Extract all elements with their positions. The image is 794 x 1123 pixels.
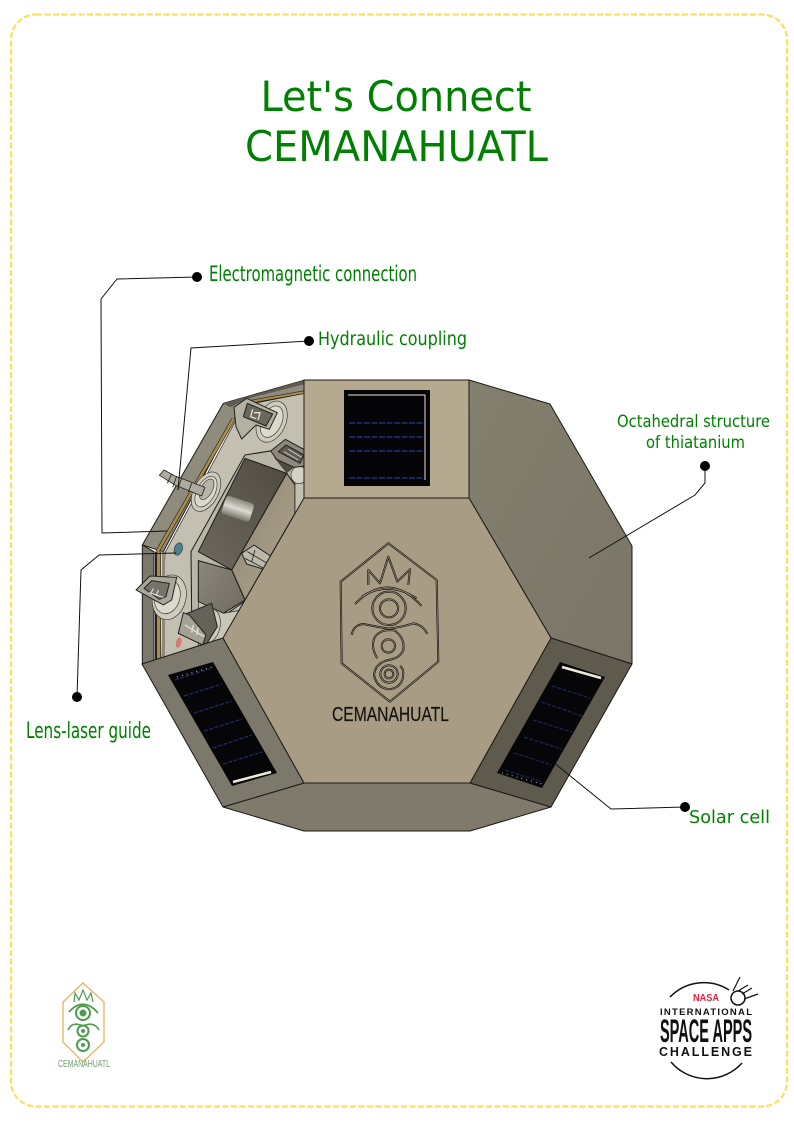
bottom bracket face: [178, 613, 206, 645]
left collar: [147, 571, 191, 624]
logo: NASA Space Apps Challenge: [659, 977, 758, 1079]
inner bracket: [242, 545, 272, 570]
label: octahedral structure: [617, 412, 770, 452]
hole lip: [191, 448, 305, 615]
top collar: [250, 396, 294, 447]
logo: CEMANAHUATL small: CEMANAHUATL: [58, 1059, 110, 1070]
bottom bracket collar: [190, 605, 224, 647]
leader line: solar cell: [553, 762, 690, 812]
panel: central hexagonal face: [223, 498, 551, 783]
label: solar cell: Solar cell: [689, 807, 770, 828]
panel: right structure face: [469, 380, 632, 664]
label: lens-laser guide: Lens-laser guide: [26, 719, 151, 744]
label: octahedral structure: Octahedral structure: [617, 412, 770, 431]
lower-right solar cell: [497, 662, 605, 788]
right bracket wedge: [274, 457, 297, 473]
label: electromagnetic connection: Electromagnetic connection: [209, 262, 417, 286]
engraved CEMANAHUATL emblem: [341, 543, 438, 702]
label: hydraulic coupling: Hydraulic coupling: [318, 329, 467, 350]
hole far wall: [198, 458, 287, 570]
leader line: electromagnetic connection: [101, 272, 202, 533]
leader line: octahedral structure: [589, 461, 710, 558]
cutaway interior: [136, 380, 307, 665]
title: [245, 72, 549, 171]
panel: lower-right structure face: [470, 638, 632, 807]
title: Let's Connect: [260, 72, 532, 121]
logo: CEMANAHUATL small: [58, 983, 110, 1070]
octahedral satellite model: [136, 380, 632, 831]
panel: lower-left structure face: [142, 638, 304, 807]
panel: bottom structure face: [223, 783, 551, 831]
central cylinder: [221, 495, 255, 523]
title: CEMANAHUATL: [245, 122, 549, 171]
leader line: lens-laser guide: [72, 553, 176, 702]
inner plate: [162, 393, 305, 659]
label: octahedral structure: of thiatanium: [646, 433, 745, 452]
plate right strip: [295, 470, 305, 513]
logo: NASA Space Apps Challenge: CHALLENGE: [659, 1045, 752, 1059]
logo: NASA Space Apps Challenge: NASA: [693, 993, 719, 1004]
top solar cell: [344, 390, 430, 486]
gold seal strip: [157, 392, 305, 659]
red tip: [175, 637, 183, 649]
bottom bracket body: [178, 603, 217, 645]
lower-left solar cell: [168, 662, 277, 786]
diagonal outer wall: [142, 380, 305, 552]
hydraulic coupling: [159, 470, 205, 496]
left outer wall: [142, 545, 154, 665]
right bracket collar: [291, 466, 307, 484]
hole lower side: [198, 561, 245, 613]
top bracket: [234, 398, 277, 439]
left bracket: [136, 576, 177, 605]
lower plate wedge: [198, 602, 242, 647]
emblem wordmark: CEMANAHUATL: [332, 704, 449, 726]
hole right side: [232, 473, 295, 600]
logo: NASA Space Apps Challenge: INTERNATIONAL: [660, 1007, 752, 1018]
hydraulic coupling collar: [185, 467, 227, 516]
leader line: hydraulic coupling: [178, 336, 314, 490]
right bracket: [271, 439, 305, 467]
panel: top face with solar cell: [304, 380, 469, 498]
lens-laser guide: [173, 542, 184, 556]
